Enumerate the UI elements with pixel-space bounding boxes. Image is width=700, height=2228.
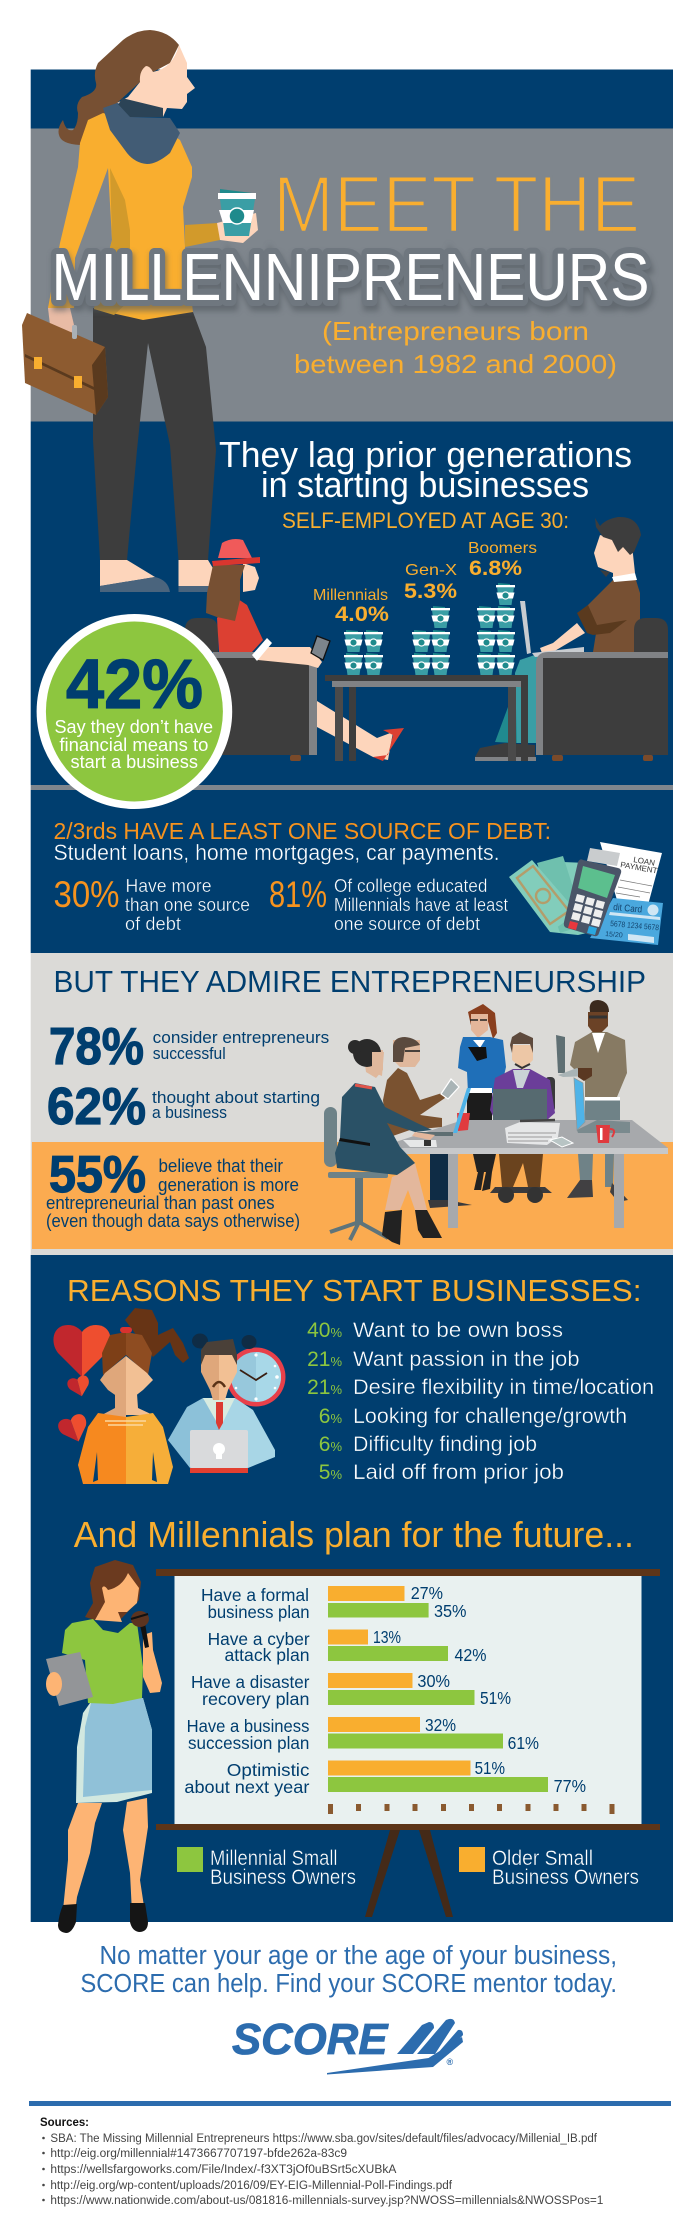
microphone (131, 1611, 149, 1648)
pants (93, 308, 216, 560)
dark hearts (192, 1334, 256, 1349)
skirt (76, 1698, 152, 1803)
callout: 42 percent: start a business (70, 752, 198, 772)
row: formal business plan (201, 1583, 466, 1622)
icon: debt money, loan paper, terminal and card: LOAN (633, 855, 656, 868)
standing woman in blue (458, 1004, 506, 1191)
stat: 81 percent: one source of debt (334, 914, 480, 934)
row: optimistic about next year (184, 1758, 586, 1797)
collar (117, 98, 163, 117)
stat: 30 percent: Have more (126, 876, 212, 896)
laptop (190, 1430, 248, 1473)
callout: 42 percent: financial means to (59, 735, 208, 755)
stat: 62 percent: thought about starting (152, 1088, 320, 1107)
seated man in purple (490, 1032, 555, 1203)
subtitle: (Entrepreneurs born (322, 316, 589, 346)
face (95, 1573, 139, 1622)
legend: older owners (459, 1847, 639, 1889)
illustration: presenter woman with microphone (46, 1560, 162, 1933)
stat: 55 percent: generation is more (158, 1175, 299, 1195)
seated woman in teal (335, 1039, 442, 1245)
illustration: seated man with laptop (475, 517, 641, 761)
top (62, 1619, 143, 1704)
stat: 81 percent: 81% (269, 874, 327, 915)
stat: 81 percent (269, 874, 508, 934)
closing message: SCORE can help. Find your SCORE mentor today. (80, 1970, 617, 1998)
row: cyber attack plan: 13% (373, 1627, 401, 1647)
row: cyber attack plan: 42% (454, 1645, 486, 1665)
closing message: No matter your age or the age of your business, (100, 1942, 617, 1970)
sweater sleeve and torso (48, 113, 193, 320)
clipboard (46, 1652, 93, 1706)
small heart lower (56, 1412, 92, 1446)
heading: they lag: They lag prior generations (219, 434, 632, 475)
stat: 78 percent (49, 1018, 329, 1076)
face (117, 45, 195, 117)
label: boomers: 6.8% (469, 557, 522, 580)
sources: Sources: (40, 2117, 89, 2129)
sources: SBA: The Missing Millennial Entrepreneurs https://www.sba.gov/sites/default/files/advocacy/Millenial_IB.pdf (50, 2133, 598, 2145)
reason 21 percent passion: 21% (307, 1348, 342, 1371)
illustration: right armchair (536, 618, 668, 761)
stat: 78 percent: consider entrepreneurs (153, 1028, 329, 1047)
reason 6 percent challenge: Looking for challenge/growth (353, 1405, 627, 1428)
row: business succession plan: Have a business (187, 1716, 310, 1736)
icon: debt money, loan paper, terminal and card: 5678 1234 5678 (610, 919, 660, 932)
illustration: coffee table (325, 675, 528, 761)
row: disaster recovery plan: 51% (480, 1688, 511, 1708)
hand (46, 1672, 62, 1696)
row: formal business plan: business plan (208, 1602, 310, 1622)
illustration: couple with hearts and clock (53, 1308, 286, 1484)
legend: older owners: Older Small (492, 1847, 593, 1870)
row: business succession plan: 61% (508, 1733, 539, 1753)
label: gen-x: 5.3% (404, 580, 457, 603)
row: cyber attack plan: Have a cyber (208, 1629, 310, 1649)
heading: admire: BUT THEY ADMIRE ENTREPRENEURSHIP (54, 964, 646, 999)
label: boomers (468, 540, 537, 580)
sources: http://eig.org/millennial#1473667707197-bfde262a-83c9 (50, 2148, 347, 2160)
hair (85, 1560, 141, 1620)
woman: face (98, 1356, 153, 1417)
heading: they lag: in starting businesses (261, 464, 589, 505)
arm (143, 1632, 162, 1693)
reason 21 percent flexibility: 21% (307, 1376, 342, 1399)
row: optimistic about next year: Optimistic (227, 1760, 310, 1780)
row: formal business plan: Have a formal (201, 1585, 309, 1605)
stat: 30 percent: 30% (54, 874, 120, 915)
hand (217, 213, 258, 243)
illustration: stacked coffee cups (344, 583, 515, 675)
legs (63, 1798, 148, 1913)
legend: millennial owners: Business Owners (210, 1866, 356, 1889)
reason 21 percent passion: Want passion in the job (353, 1348, 580, 1371)
stat: 78 percent: successful (153, 1044, 226, 1063)
subtitle (294, 316, 617, 379)
woman: hair (102, 1327, 152, 1375)
woman: ponytail (125, 1308, 189, 1363)
stat: 62 percent: a business (152, 1103, 227, 1122)
row: business succession plan: succession plan (188, 1733, 309, 1753)
stat: 55 percent: believe that their (158, 1156, 283, 1176)
stat: 55 percent (46, 1146, 300, 1231)
illustration: presentation board easel (156, 1569, 660, 1917)
stat: 30 percent (54, 874, 250, 934)
row: disaster recovery plan: recovery plan (202, 1689, 309, 1709)
icon: debt money, loan paper, terminal and card (509, 842, 663, 945)
shoes (100, 560, 214, 592)
closing message (80, 1942, 617, 1998)
legend: millennial owners: Millennial Small (210, 1847, 338, 1870)
callout: 42 percent (37, 614, 232, 809)
seated man in brown (383, 1037, 472, 1208)
label: millennials: 4.0% (335, 603, 389, 626)
label: gen-x (404, 562, 457, 603)
clock (226, 1348, 286, 1406)
icon: debt money, loan paper, terminal and card: PAYMENT (620, 860, 658, 875)
desk top items (377, 1078, 668, 1228)
illustration: office team around a desk (324, 1000, 668, 1245)
stat: 30 percent: than one source (125, 895, 250, 915)
row: cyber attack plan: attack plan (224, 1645, 310, 1665)
panel: admire section background (31, 953, 673, 1255)
sources: https://www.nationwide.com/about-us/081816-millennials-survey.jsp?NWOSS=millennials&NWOSSPos=1 (50, 2195, 603, 2207)
man: body (168, 1398, 275, 1468)
coffee cup (218, 189, 256, 236)
row: cyber attack plan (208, 1627, 486, 1665)
heading: reasons: REASONS THEY START BUSINESSES: (67, 1273, 642, 1308)
row: disaster recovery plan: 30% (417, 1671, 450, 1691)
panel: lag section background (31, 422, 673, 785)
label: millennials (313, 587, 389, 626)
subtitle: between 1982 and 2000) (294, 349, 617, 379)
office chair (324, 1107, 388, 1240)
heading: debt: 2/3rds HAVE A LEAST ONE SOURCE OF DEBT: (54, 818, 551, 844)
title: MEET THE: MEET THE (273, 160, 640, 250)
logo: SCORE: ® (446, 2057, 454, 2067)
row: disaster recovery plan (191, 1671, 511, 1709)
illustration: left armchair (185, 618, 317, 761)
big heart (53, 1325, 111, 1377)
divider (29, 2101, 671, 2106)
icon: debt money, loan paper, terminal and card: 15/20 (605, 931, 623, 940)
reason 6 percent challenge: 6% (319, 1405, 342, 1428)
subheading: self-employed: SELF-EMPLOYED AT AGE 30: (282, 508, 569, 533)
hair (58, 30, 179, 145)
row: optimistic about next year: about next year (184, 1777, 310, 1797)
row: business succession plan: 32% (425, 1715, 456, 1735)
shoes (58, 1903, 148, 1933)
label: gen-x: Gen-X (405, 562, 457, 579)
heading: future: And Millennials plan for the future... (74, 1514, 634, 1555)
legend: millennial owners (177, 1847, 356, 1889)
row: formal business plan: 35% (434, 1601, 466, 1621)
sources (40, 2117, 603, 2207)
stat: 78 percent: 78% (49, 1018, 144, 1076)
row: formal business plan: 27% (411, 1583, 443, 1603)
stat: 55 percent: 55% (49, 1146, 146, 1204)
stat: 62 percent: 62% (47, 1078, 146, 1136)
briefcase hand (48, 308, 74, 338)
logo: SCORE (232, 2015, 463, 2074)
panel: hero background (31, 70, 673, 422)
standing man in taupe (556, 1000, 628, 1202)
heading: they lag (219, 434, 632, 505)
label: boomers: Boomers (468, 540, 537, 557)
row: disaster recovery plan: Have a disaster (191, 1672, 310, 1692)
row: business succession plan (187, 1715, 539, 1753)
reason 6 percent difficulty: Difficulty finding job (353, 1433, 537, 1456)
small heart upper (66, 1374, 92, 1399)
forearm (185, 223, 220, 247)
reason 5 percent laid off: 5% (319, 1461, 342, 1484)
callout: 42 percent: 42% (66, 645, 203, 723)
scarf (103, 103, 180, 164)
reason 5 percent laid off: Laid off from prior job (353, 1461, 564, 1484)
icon: debt money, loan paper, terminal and card: dit Card (613, 902, 643, 916)
panel: reasons and future section background (31, 1255, 673, 1922)
sources: http://eig.org/wp-content/uploads/2016/09/EY-EIG-Millennial-Poll-Findings.pdf (50, 2180, 453, 2192)
stat: 62 percent (47, 1078, 320, 1136)
man: head (201, 1339, 237, 1400)
panel: debt section background (31, 785, 673, 953)
stat: 81 percent: Of college educated (334, 876, 488, 896)
callout: 42 percent: Say they don’t have (54, 717, 213, 737)
bar chart: plans by owner generation (184, 1583, 586, 1797)
stat: 30 percent: of debt (125, 914, 181, 934)
stat: 55 percent: (even though data says otherwise) (46, 1211, 300, 1231)
reason 6 percent difficulty: 6% (319, 1433, 342, 1456)
illustration: woman with briefcase and coffee (22, 30, 258, 592)
reasons list (307, 1319, 654, 1484)
row: optimistic about next year: 51% (475, 1758, 505, 1778)
woman: sweater (78, 1413, 173, 1484)
reason 40 percent: 40% (307, 1319, 342, 1342)
row: optimistic about next year: 77% (554, 1776, 586, 1796)
label: millennials: Millennials (313, 587, 388, 604)
stat: 55 percent: entrepreneurial than past ones (46, 1193, 274, 1213)
illustration: seated woman in red hat (206, 539, 404, 761)
text: debt types: Student loans, home mortgages, car payments. (54, 840, 500, 865)
reason 21 percent flexibility: Desire flexibility in time/location (353, 1376, 654, 1399)
logo: SCORE: SCORE (232, 2015, 389, 2064)
briefcase (22, 313, 108, 415)
reason 40 percent: Want to be own boss (353, 1319, 563, 1342)
legend: older owners: Business Owners (492, 1866, 639, 1889)
sources: https://wellsfargoworks.com/File/Index/-f3XT3jOf0uBSrt5cXUBkA (50, 2164, 397, 2176)
stat: 81 percent: Millennials have at least (334, 895, 508, 915)
